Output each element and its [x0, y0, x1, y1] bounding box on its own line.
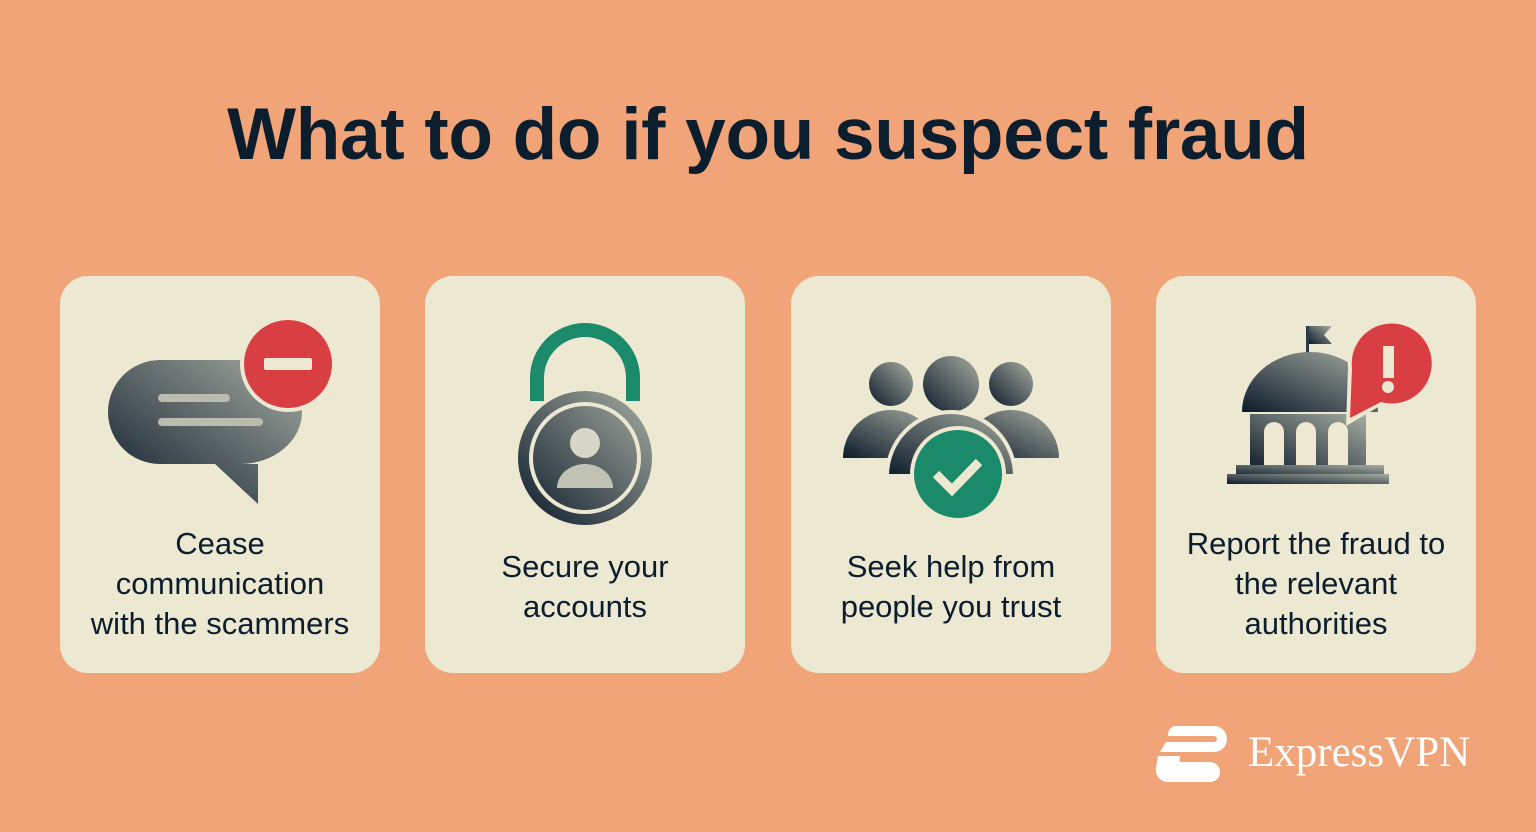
- icon: chat bubble with minus: [108, 320, 332, 504]
- icon: logo mark: [1156, 726, 1227, 782]
- panel: cease communication: [60, 276, 380, 673]
- text: [501, 549, 669, 624]
- text: communication: [116, 566, 324, 601]
- text: Seek help from: [847, 549, 1055, 584]
- panel: report: [1156, 276, 1476, 673]
- text: people you trust: [841, 589, 1061, 624]
- text: with the scammers: [91, 606, 349, 641]
- logo text: ExpressVPN: [1248, 729, 1470, 776]
- text: Report the fraud to: [1187, 526, 1445, 561]
- icon: padlock: [518, 323, 652, 525]
- text: Secure your: [501, 549, 669, 584]
- text: Cease: [175, 526, 265, 561]
- text: accounts: [523, 589, 647, 624]
- logo: ExpressVPN: [1156, 726, 1470, 782]
- title: What to do if you suspect fraud: [227, 94, 1309, 175]
- icon: people with check: [843, 356, 1059, 518]
- icon: government building with alert: [1227, 324, 1432, 484]
- text: [1187, 526, 1445, 641]
- text: the relevant: [1235, 566, 1397, 601]
- text: [841, 549, 1061, 624]
- text: [90, 526, 349, 641]
- text: authorities: [1244, 606, 1388, 641]
- panel: seek help: [791, 276, 1111, 673]
- panel: secure accounts: [425, 276, 745, 673]
